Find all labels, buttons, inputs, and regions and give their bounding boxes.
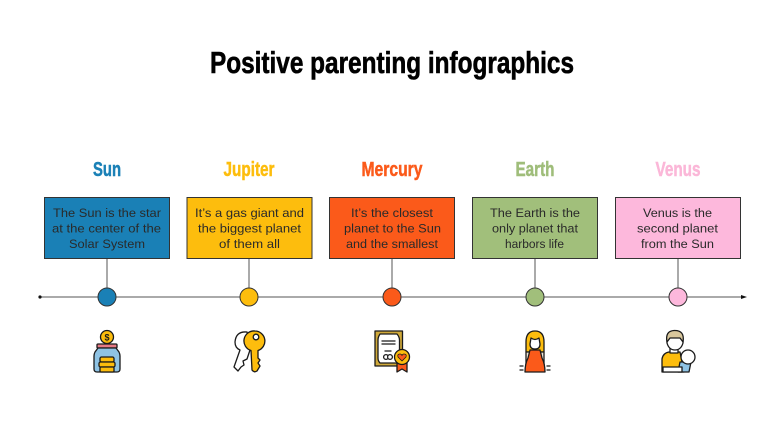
text box: Earth <box>472 198 598 258</box>
marker: Venus <box>669 288 687 306</box>
text box: Earth: The Earth is the <box>490 206 580 220</box>
connector: Mercury <box>391 258 393 297</box>
icon: coin jar <box>94 330 120 372</box>
panel: Mercury <box>330 159 454 372</box>
text box: Sun: The Sun is the star <box>53 206 161 220</box>
text box: Venus: second planet <box>637 222 719 236</box>
marker: Mercury <box>383 288 401 306</box>
heading: Venus: Venus <box>656 159 700 181</box>
icon: pregnant woman <box>520 331 550 372</box>
marker: Sun <box>98 288 116 306</box>
text box: Venus: Venus is the <box>643 206 712 220</box>
text box: Sun: Solar System <box>69 237 145 251</box>
text box: Sun <box>44 198 170 258</box>
panel: Venus <box>616 159 740 372</box>
text box: Mercury: and the smallest <box>346 237 439 251</box>
text box: Venus <box>616 198 740 258</box>
icon: keys <box>234 331 265 372</box>
heading: Earth: Earth <box>516 159 554 181</box>
icon: coin jar: $ <box>104 332 110 342</box>
text box: Venus: from the Sun <box>641 237 714 251</box>
panel: Earth <box>472 159 598 372</box>
icon: certificate with ribbon <box>375 331 410 372</box>
text box: Mercury: It’s the closest <box>351 206 434 220</box>
text box: Mercury <box>330 198 454 258</box>
heading: Jupiter: Jupiter <box>224 159 275 181</box>
text box: Jupiter: of them all <box>219 237 280 251</box>
marker: Earth <box>526 288 544 306</box>
icon: parent holding baby <box>662 330 695 372</box>
timeline arrow <box>38 295 747 299</box>
text box: Earth: harbors life <box>505 237 564 251</box>
marker: Jupiter <box>240 288 258 306</box>
heading: Sun: Sun <box>93 159 121 181</box>
connector: Earth <box>534 258 536 297</box>
text box: Earth: only planet that <box>492 222 579 236</box>
panel: Sun <box>44 159 170 372</box>
heading: Mercury: Mercury <box>362 159 423 181</box>
panel: Jupiter <box>187 159 312 372</box>
text box: Jupiter: It’s a gas giant and <box>195 206 304 220</box>
text box: Jupiter <box>187 198 312 258</box>
text box: Mercury: planet to the Sun <box>344 222 441 236</box>
text box: Sun: at the center of the <box>52 222 161 236</box>
connector: Sun <box>106 258 108 297</box>
text box: Jupiter: the biggest planet <box>198 222 302 236</box>
connector: Venus <box>677 258 679 297</box>
title: Positive parenting infographics <box>210 45 574 80</box>
connector: Jupiter <box>248 258 250 297</box>
